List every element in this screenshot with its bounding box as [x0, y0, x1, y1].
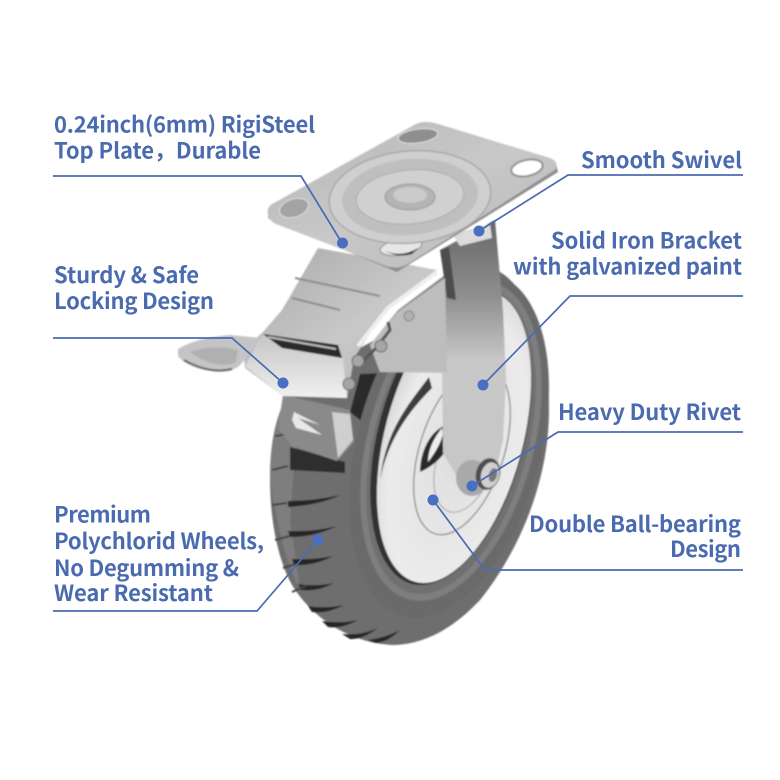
- brake lock fender: [278, 395, 354, 461]
- callout: locking design: Locking Design: [54, 284, 214, 316]
- callout: wheels: [53, 498, 324, 611]
- callout: ball bearing: Double Ball-bearing: [529, 507, 741, 539]
- callout: top plate: 0.24inch(6mm) RigiSteel: [54, 108, 315, 140]
- mounting holes: [277, 126, 544, 259]
- callout: top plate: Top Plate，Durable: [54, 134, 261, 166]
- callout: heavy duty rivet: [466, 395, 743, 492]
- brake pedal: [178, 335, 262, 372]
- callout: wheels: Polychlorid Wheels,: [54, 524, 264, 556]
- caster wheel illustration: [178, 122, 584, 645]
- metal hub: [341, 271, 561, 603]
- callout: wheels: No Degumming &: [54, 551, 239, 583]
- brake lever: [243, 248, 437, 398]
- callout: locking design: Sturdy & Safe: [54, 258, 199, 290]
- tire tread: [270, 272, 549, 645]
- callout: smooth swivel: Smooth Swivel: [581, 143, 742, 175]
- swivel bracket: [370, 220, 506, 477]
- callout: iron bracket: with galvanized paint: [513, 250, 742, 282]
- top plate: [268, 122, 558, 272]
- callout: ball bearing: Design: [670, 532, 741, 564]
- callout: smooth swivel: [474, 143, 743, 236]
- callout: wheels: Wear Resistant: [54, 576, 213, 608]
- callout: iron bracket: [478, 224, 743, 390]
- pressed rings: [325, 144, 495, 250]
- callout: top plate: [53, 108, 348, 248]
- callout: wheels: Premium: [54, 498, 151, 530]
- callout: heavy duty rivet: Heavy Duty Rivet: [558, 395, 741, 427]
- callout: locking design: [53, 258, 288, 388]
- tire sidewall: [314, 250, 584, 640]
- callout: ball bearing: [428, 494, 743, 570]
- callout: iron bracket: Solid Iron Bracket: [551, 224, 742, 256]
- axle bolt and rivet: [456, 455, 504, 496]
